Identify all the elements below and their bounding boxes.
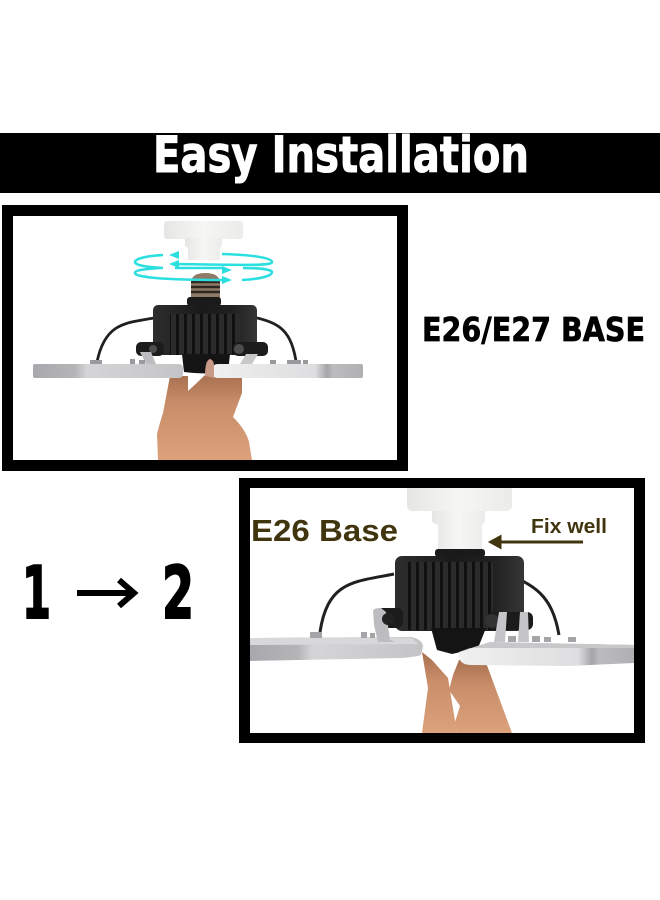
- label: step sequence: 2: [162, 551, 194, 635]
- title banner: [0, 126, 660, 193]
- arrow: fix well pointer: [491, 537, 583, 547]
- icon: wires: [97, 315, 296, 362]
- icon: hinge brackets: [373, 608, 533, 642]
- label: step sequence: [22, 551, 194, 635]
- icon: right light panel: [459, 642, 634, 666]
- icon: fingers: [422, 652, 512, 733]
- icon: screw base: [187, 273, 221, 306]
- label: step sequence: 1: [22, 551, 51, 635]
- icon: left light panel: [250, 637, 423, 661]
- icon: thumb: [205, 359, 214, 378]
- panel: step 2 photo frame: [239, 478, 645, 743]
- icon: bulb adapter: [164, 221, 243, 260]
- icon: rotation arrows: [135, 251, 272, 284]
- label: Fix well: Fix well: [531, 516, 607, 538]
- icon: installed bulb: [407, 488, 512, 557]
- label: E26 Base: E26 Base: [251, 513, 398, 548]
- icon: hand holding lamp: [157, 374, 252, 460]
- icon: driver housing: [395, 556, 524, 654]
- icon: wires: [320, 572, 559, 635]
- arrow: step 1 to step 2: [77, 580, 134, 606]
- icon: driver housing: [153, 305, 257, 374]
- panel: step 1 photo frame: [2, 205, 408, 471]
- icon: hinge brackets: [136, 342, 268, 364]
- icon: left light panel: [33, 364, 183, 378]
- title text: Easy Installation: [153, 126, 529, 184]
- icon: right light panel: [213, 364, 363, 378]
